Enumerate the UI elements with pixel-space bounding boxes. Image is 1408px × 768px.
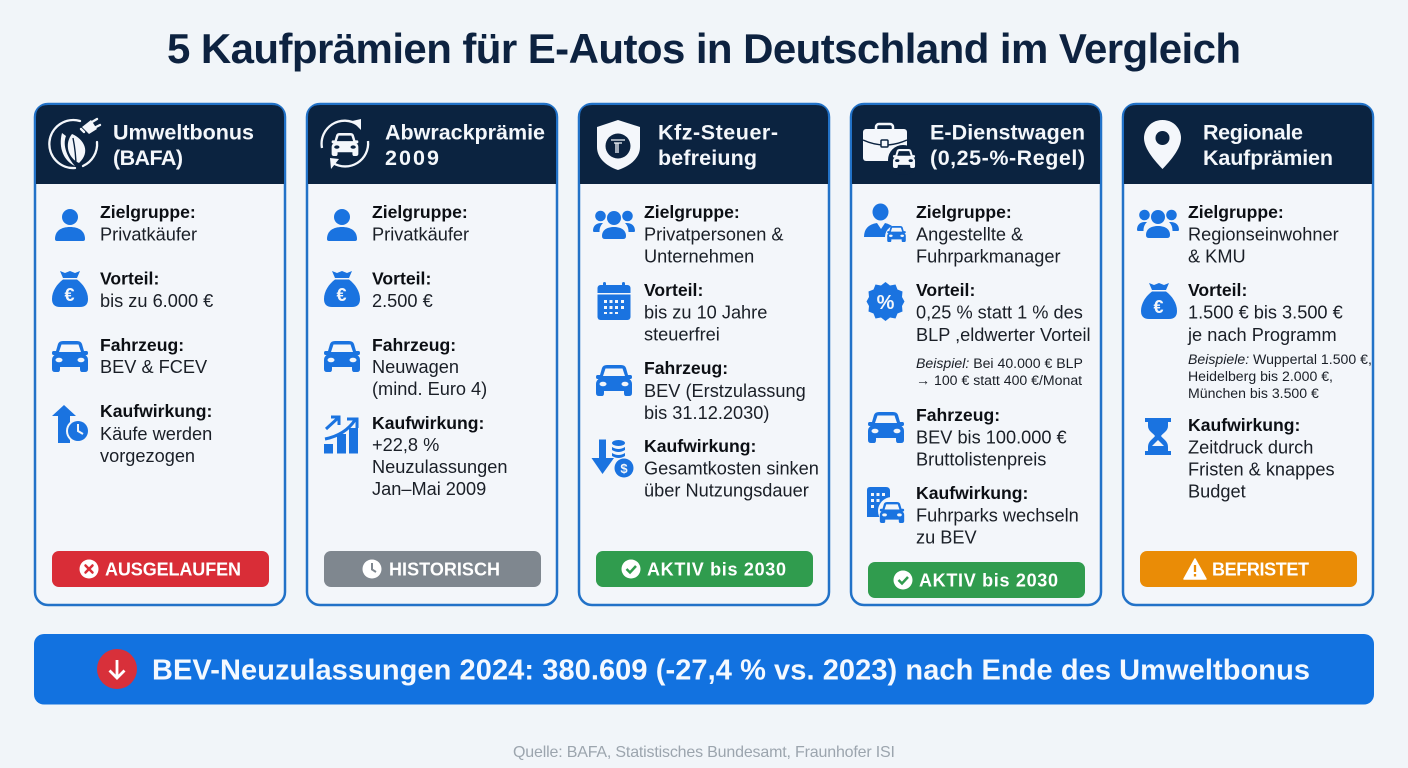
text: Fahrzeug: bis 31.12.2030) (644, 403, 769, 423)
row: Zielgruppe (1137, 202, 1339, 266)
status: aktiv: AKTIV bis 2030 (647, 560, 786, 580)
row: Kaufwirkung (52, 401, 212, 466)
text: Beispiel: → 100 € statt 400 €/Monat (916, 372, 1082, 388)
text: Kaufwirkung: Kaufwirkung: (916, 483, 1028, 503)
text: Fahrzeug: Neuwagen (372, 357, 459, 377)
heading: Regionale: Regionale (1203, 120, 1303, 144)
source note: Quelle: BAFA, Statistisches Bundesamt, Fraunhofer ISI (513, 744, 895, 761)
icon: briefcase with car (863, 124, 918, 175)
banner (34, 634, 1374, 704)
heading: BAFA: (BAFA) (113, 146, 183, 170)
text: Zielgruppe: Zielgruppe: (644, 202, 740, 222)
status: aktiv (868, 562, 1085, 598)
icon: costs down: $ (620, 461, 628, 476)
text: Fahrzeug: BEV bis 100.000 € (916, 428, 1067, 448)
heading: 2009: 2009 (385, 146, 439, 170)
text: Fahrzeug: Fahrzeug: (100, 335, 184, 355)
icon: costs down (592, 440, 634, 478)
text: Fahrzeug: Fahrzeug: (372, 335, 456, 355)
text: Vorteil: Vorteil: (372, 268, 431, 288)
row: Vorteil (1141, 280, 1343, 345)
text: Zielgruppe: Angestellte & (916, 224, 1023, 244)
text: Zielgruppe: Privatkäufer (372, 224, 469, 244)
row: Kaufwirkung (324, 413, 508, 499)
text: Zielgruppe: Fuhrparkmanager (916, 246, 1061, 266)
text: Fahrzeug: Fahrzeug: (916, 405, 1000, 425)
panel: E-Dienstwagen (851, 104, 1101, 605)
text: Fahrzeug: Bruttolistenpreis (916, 450, 1046, 470)
icon: money bag (1141, 283, 1177, 319)
text: Zielgruppe: Zielgruppe: (1188, 202, 1284, 222)
row: Fahrzeug (324, 335, 487, 399)
panel header: Kfz-Steuerbefreiung (580, 105, 828, 184)
heading: Abwrackprämie: Abwrackprämie (385, 120, 545, 144)
text: Kaufwirkung: Kaufwirkung: (1188, 415, 1300, 435)
icon: map pin (1144, 120, 1181, 169)
text: Zielgruppe: Unternehmen (644, 246, 754, 266)
panel: Regionale Kaufprämien (1123, 104, 1373, 605)
icon: money bag (52, 271, 88, 307)
text: Kaufwirkung: Käufe werden (100, 424, 212, 444)
row: Fahrzeug (596, 358, 806, 423)
status: befristet (1140, 551, 1357, 587)
status: aktiv: AKTIV bis 2030 (919, 570, 1058, 590)
text: Zielgruppe: Privatpersonen & (644, 224, 784, 244)
icon: recycling car (322, 119, 368, 169)
panel header: E-Dienstwagen (852, 105, 1100, 184)
text: Vorteil: je nach Programm (1187, 325, 1337, 345)
heading: E-Dienstwagen: E-Dienstwagen (930, 120, 1085, 144)
text: Kaufwirkung: Kaufwirkung: (644, 436, 756, 456)
text: Beispiele: Heidelberg bis 2.000 €, (1188, 368, 1333, 384)
row: Vorteil (324, 268, 433, 311)
icon: map pin hole (1156, 131, 1170, 145)
heading: Kfz-Steuer-: Kfz-Steuer- (658, 120, 778, 144)
icon: percent badge: % (877, 292, 895, 314)
text: Vorteil: steuerfrei (644, 324, 720, 344)
row: Kaufwirkung (867, 483, 1079, 548)
text: Kaufwirkung: Zeitdruck durch (1188, 438, 1313, 458)
text: Kaufwirkung: Jan–Mai 2009 (372, 479, 486, 499)
icon: red down arrow (97, 649, 137, 689)
text: Kaufwirkung: Fuhrparks wechseln (916, 506, 1079, 526)
text: Kaufwirkung: zu BEV (916, 528, 978, 548)
text: Kaufwirkung: Neuzulassungen (372, 457, 508, 477)
panel: Abwrackprämie (307, 104, 557, 605)
heading: befreiung: befreiung (658, 146, 757, 170)
text: Beispiele: Beispiele: Wuppertal 1.500 €, (1188, 351, 1372, 367)
text: Zielgruppe: Zielgruppe: (916, 202, 1012, 222)
icon: shield (597, 120, 640, 170)
status: ausgelaufen: AUSGELAUFEN (105, 560, 241, 580)
text: Fahrzeug: BEV (Erstzulassung (644, 381, 806, 401)
row: Fahrzeug (868, 405, 1067, 470)
text: Vorteil: Vorteil: (644, 280, 703, 300)
text: Zielgruppe: & KMU (1188, 246, 1246, 266)
status: ausgelaufen (52, 551, 269, 587)
row: Fahrzeug (52, 335, 208, 377)
icon: percent badge (866, 282, 904, 321)
panel: Umweltbonus (35, 104, 285, 605)
text: Vorteil: BLP ,eldwerter Vorteil (916, 325, 1091, 345)
text: Kaufwirkung: Kaufwirkung: (100, 401, 212, 421)
icon: calendar (598, 282, 630, 320)
text: Kaufwirkung: Gesamtkosten sinken (644, 458, 819, 478)
panel header: Regionale Kaufprämien (1124, 105, 1372, 184)
icon: rising chart (324, 417, 358, 454)
row: Zielgruppe (327, 202, 469, 244)
row: Zielgruppe (593, 202, 784, 266)
text: Vorteil: Vorteil: (916, 280, 975, 300)
heading: Regel: (0,25-%-Regel) (930, 146, 1085, 170)
panel header: Abwrackprämie (308, 105, 556, 184)
heading: Kaufprämien: Kaufprämien (1203, 146, 1333, 170)
text: Vorteil: bis zu 10 Jahre (644, 302, 767, 322)
row: Zielgruppe (864, 202, 1061, 266)
text: Beispiele: München bis 3.500 € (1188, 385, 1319, 401)
panel header: Umweltbonus (36, 105, 284, 184)
icon: money bag: € (1153, 297, 1164, 317)
icon: employee with car (864, 204, 906, 242)
text: Zielgruppe: Privatkäufer (100, 224, 197, 244)
text: Kaufwirkung: Budget (1188, 482, 1246, 502)
icon: money bag: € (64, 285, 75, 305)
text: Beispiel: Beispiel: Bei 40.000 € BLP (916, 355, 1083, 371)
text: Zielgruppe: Regionseinwohner (1188, 224, 1339, 244)
text: Zielgruppe: Zielgruppe: (372, 202, 468, 222)
text: Vorteil: 1.500 € bis 3.500 € (1188, 302, 1343, 322)
panel: Kfz-Steuerbefreiung (579, 104, 829, 605)
text: Vorteil: Vorteil: (100, 268, 159, 288)
text: Vorteil: Vorteil: (1188, 280, 1247, 300)
icon: person (327, 209, 357, 241)
heading: Umweltbonus: Umweltbonus (113, 120, 254, 144)
text: Kaufwirkung: Kaufwirkung: (372, 413, 484, 433)
icon: car (596, 365, 632, 396)
icon: arrow up with clock (52, 405, 90, 443)
text: Kaufwirkung: über Nutzungsdauer (644, 480, 809, 500)
status: historisch: HISTORISCH (389, 560, 500, 580)
row: Zielgruppe (55, 202, 197, 244)
text: Fahrzeug: (mind. Euro 4) (372, 379, 487, 399)
icon: car (324, 341, 360, 372)
icon: hourglass (1145, 418, 1171, 455)
banner text: BEV-Neuzulassungen 2024: 380.609 (-27,4 % vs. 2023) nach Ende des Umweltbonus (152, 654, 1310, 686)
text: Kaufwirkung: +22,8 % (372, 435, 439, 455)
row: Vorteil (598, 280, 767, 344)
text: Fahrzeug: BEV & FCEV (100, 357, 208, 377)
icon: building with car (867, 487, 906, 525)
row: Kaufwirkung (592, 436, 819, 500)
icon: group (593, 211, 635, 239)
text: Kaufwirkung: vorgezogen (100, 446, 195, 466)
text: Vorteil: bis zu 6.000 € (100, 291, 213, 311)
row: Vorteil (52, 268, 213, 311)
title: 5 Kaufprämien für E-Autos in Deutschland im Vergleich (167, 25, 1241, 72)
text: Zielgruppe: Zielgruppe: (100, 202, 196, 222)
status: befristet: BEFRISTET (1212, 560, 1309, 580)
text: Vorteil: 2.500 € (372, 291, 433, 311)
text: Fahrzeug: Fahrzeug: (644, 358, 728, 378)
icon: car (52, 341, 88, 372)
icon: money bag: € (336, 285, 347, 305)
icon: leaf with plug (49, 119, 100, 168)
icon: group (1137, 210, 1179, 238)
row: Vorteil (866, 280, 1091, 345)
icon: person (55, 209, 85, 241)
status: aktiv (596, 551, 813, 587)
status: historisch (324, 551, 541, 587)
text: Kaufwirkung: Fristen & knappes (1188, 460, 1335, 480)
row: Kaufwirkung (1145, 415, 1335, 502)
text: Vorteil: 0,25 % statt 1 % des (916, 302, 1083, 322)
icon: car (868, 412, 904, 443)
